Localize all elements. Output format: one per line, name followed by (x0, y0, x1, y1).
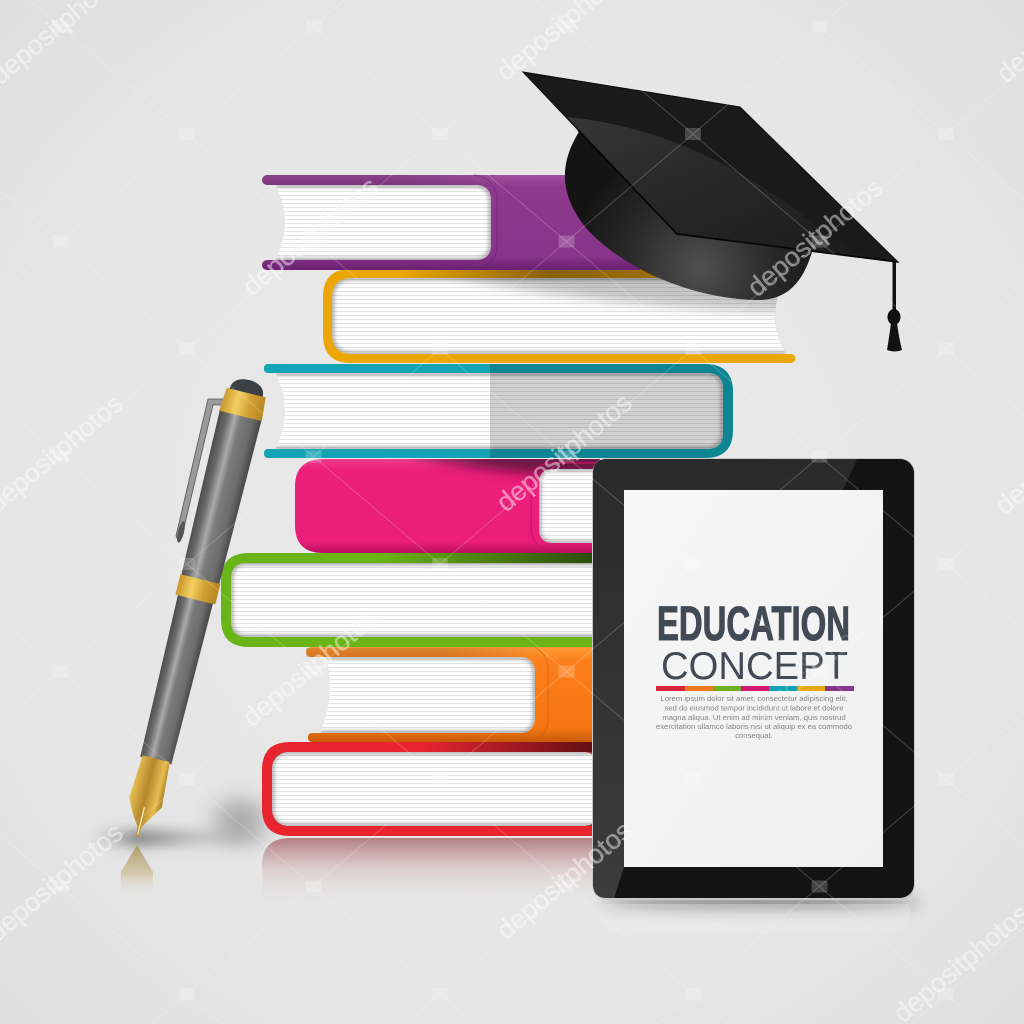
ground shadows (95, 800, 920, 934)
shadow on yellow book (449, 278, 778, 318)
watermark: depositphotos (742, 601, 889, 732)
watermark: depositphotos (491, 387, 638, 518)
book: pink (295, 459, 600, 553)
tablet glare (593, 459, 857, 898)
book: red (262, 742, 600, 836)
watermark: depositphotos (237, 171, 384, 302)
cap board edge (578, 130, 898, 262)
watermark: depositphotos (742, 172, 889, 303)
icon: fountain pen (116, 375, 271, 897)
watermark: depositphotos (237, 602, 384, 733)
cap board (523, 72, 898, 262)
pen gold ring (219, 387, 268, 421)
book: purple (262, 175, 640, 270)
tablet (592, 458, 915, 900)
teal book shaded half (490, 364, 733, 458)
body text: sed do eiusmod tempor incididunt ut labore et dolore (664, 704, 844, 712)
watermark: depositphotos (491, 815, 638, 946)
body text: consequat. (735, 731, 773, 740)
cap board highlight (567, 117, 868, 258)
tassel (887, 262, 902, 352)
book: orange (306, 647, 600, 742)
screen text block (656, 598, 854, 740)
tablet screen (624, 490, 883, 867)
book: green (221, 553, 600, 647)
pen gold band (175, 574, 220, 604)
tablet body (592, 458, 915, 900)
book: teal (264, 364, 733, 458)
rainbow divider (656, 686, 854, 691)
book: yellow (323, 269, 796, 363)
body text: Lorem ipsum dolor sit amet, consectetur adipiscing elit, (660, 694, 848, 703)
icon: graduation cap (523, 72, 902, 352)
pen barrel lower (138, 595, 213, 765)
cap body (565, 130, 812, 300)
book reflection (262, 838, 600, 905)
body text: magna aliqua. Ut enim ad minim veniam, quis nostrud (662, 713, 846, 722)
heading: concept: CONCEPT (661, 645, 848, 688)
pen clip (175, 399, 224, 543)
heading: education: EDUCATION (657, 598, 850, 651)
body text (656, 694, 852, 740)
pen nib reflection (121, 845, 153, 897)
pen barrel upper (179, 408, 262, 586)
pen cap top (229, 376, 266, 399)
body text: exercitation ullamco laboris nisi ut aliquip ex ea commodo (656, 722, 852, 731)
pen nib (120, 755, 173, 841)
